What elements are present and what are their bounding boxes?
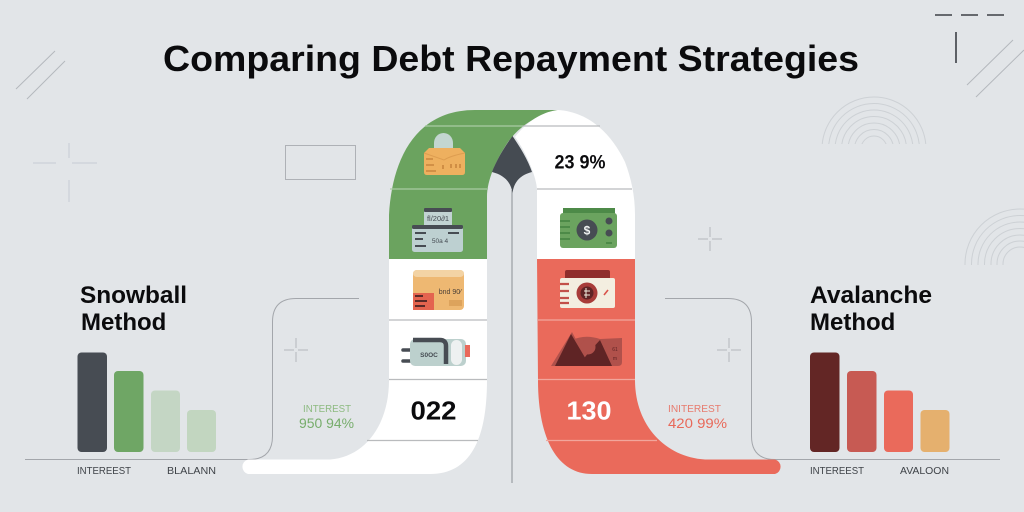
icon: plug device	[403, 339, 470, 366]
callout: snowball interest: 950 94%	[299, 415, 354, 431]
bar chart: avalanche: AVALOON	[900, 466, 949, 477]
center divider line	[511, 190, 513, 483]
icon: mountain and calendar: m	[613, 356, 617, 362]
icon: bank card and ticket: 50a 4	[432, 238, 449, 245]
icon: green banknote	[560, 208, 617, 248]
bar chart: avalanche	[810, 352, 950, 477]
icon: mountain and calendar: 61	[612, 347, 618, 353]
icon: green banknote: $	[584, 224, 591, 238]
panel: snowball ribbon	[242, 110, 558, 474]
icon: red ticket	[560, 270, 615, 308]
value: 23 9%: 23 9%	[554, 152, 606, 174]
icon: plug device: S0OC	[420, 352, 438, 359]
callout: avalanche interest: 420 99%	[668, 415, 727, 431]
center dark wedge	[492, 136, 532, 193]
bar chart: snowball	[77, 352, 216, 477]
callout: avalanche interest	[668, 403, 727, 431]
icon: bank card and ticket: fl/20∂1	[427, 214, 449, 223]
heading: Avalanche Method: Method	[810, 309, 895, 336]
background decorations	[16, 15, 1024, 362]
icon: parcel box: bnd 90⁄	[439, 289, 463, 296]
callout: avalanche interest: INITEREST	[668, 403, 722, 415]
icon: bank card and ticket	[412, 208, 463, 252]
icon: parcel box	[413, 270, 464, 310]
heading: Avalanche Method: Avalanche	[810, 282, 932, 309]
bar chart: snowball: INTEREEST	[77, 466, 131, 477]
bar chart: snowball: BLALANN	[167, 466, 216, 477]
callout: snowball interest	[299, 403, 354, 431]
value: 022: 022	[410, 396, 456, 426]
value: 130: 130	[566, 396, 612, 426]
bar chart: avalanche: INTEREEST	[810, 466, 864, 477]
icon: envelope with coin	[424, 133, 465, 175]
panel: avalanche ribbon	[515, 110, 781, 474]
callout: snowball interest: INTEREST	[303, 403, 352, 415]
connector outlines and baselines	[25, 298, 1000, 460]
heading: Snowball Method: Snowball	[80, 282, 187, 309]
title: Comparing Debt Repayment Strategies	[163, 38, 859, 79]
heading: Snowball Method: Method	[81, 309, 166, 336]
icon: mountain and calendar	[551, 332, 622, 366]
